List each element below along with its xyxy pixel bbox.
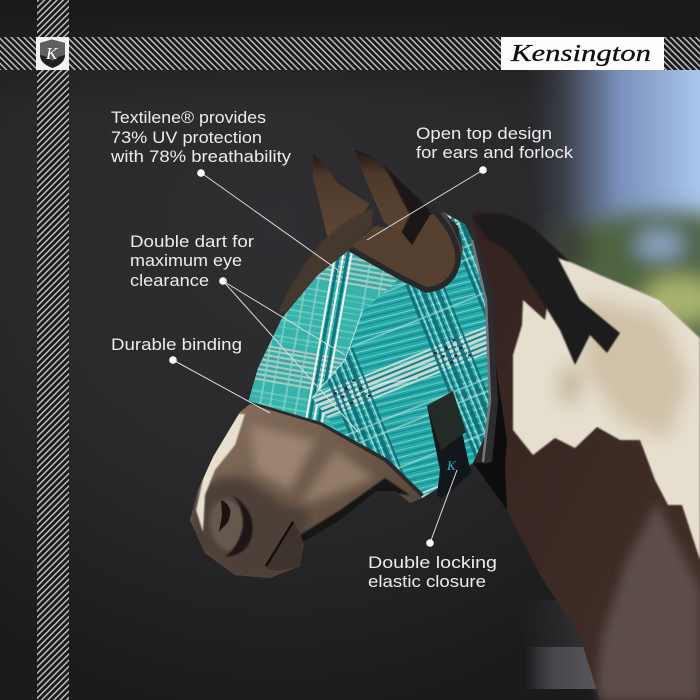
leader line xyxy=(430,470,457,543)
text: Durable binding xyxy=(111,336,242,354)
callout: Textilene xyxy=(110,109,338,270)
dark muzzle xyxy=(190,477,310,582)
callout: durable binding xyxy=(111,336,270,413)
forelock xyxy=(279,209,373,312)
dot xyxy=(479,166,487,174)
horse neck and body xyxy=(470,211,700,700)
throat shadow xyxy=(473,360,507,510)
white coat patch xyxy=(513,255,700,560)
dart seams xyxy=(312,312,418,398)
dot xyxy=(169,356,177,364)
icon: K shield logo: K xyxy=(45,44,59,63)
dot xyxy=(219,277,227,285)
back binding highlight xyxy=(472,240,490,462)
text: 73% UV protection xyxy=(111,129,262,147)
top opening binding xyxy=(350,208,458,290)
back binding xyxy=(464,222,498,464)
background floor: upper xyxy=(520,600,610,647)
leader line xyxy=(367,170,483,240)
coat tan shading xyxy=(558,295,690,440)
mouth xyxy=(266,522,303,570)
text: clearance xyxy=(130,272,209,290)
callout: open top design xyxy=(367,125,574,240)
plaid: base weave xyxy=(248,212,489,498)
closure strap: K xyxy=(446,458,457,473)
text: Textilene® provides xyxy=(111,109,266,127)
stripe band: horizontal left xyxy=(0,37,501,70)
poll and forehead xyxy=(352,212,463,291)
fly mask xyxy=(240,200,500,500)
dot xyxy=(426,539,434,547)
background floor: lit band xyxy=(525,647,605,689)
text: maximum eye xyxy=(130,252,242,270)
text xyxy=(110,109,292,166)
closure strap xyxy=(427,391,471,499)
text: for ears and forlock xyxy=(416,144,574,162)
horse nose and muzzle xyxy=(190,404,422,578)
stripe band: horizontal right xyxy=(664,37,700,70)
coat highlights xyxy=(250,425,375,505)
white blaze xyxy=(196,414,245,532)
mane xyxy=(472,213,620,365)
icon: K shield logo xyxy=(36,37,69,70)
ear: left xyxy=(313,155,370,240)
logo: Kensington wordmark: Kensington xyxy=(510,41,651,67)
shoulder grey coat xyxy=(598,503,700,700)
nostril xyxy=(206,495,253,557)
leader line xyxy=(200,172,338,270)
ear shadow xyxy=(384,165,445,250)
text: elastic closure xyxy=(368,573,486,591)
dot xyxy=(197,169,205,177)
leader line xyxy=(173,360,270,413)
text: Double locking xyxy=(368,554,497,572)
ear: right xyxy=(355,150,428,250)
text xyxy=(130,233,255,290)
text xyxy=(416,125,574,162)
logo: Kensington wordmark xyxy=(501,37,664,70)
plaid: face panel xyxy=(248,250,398,431)
text xyxy=(368,554,497,591)
jaw shadow xyxy=(300,478,410,545)
leader lines xyxy=(223,281,358,432)
callout: double dart xyxy=(130,233,358,432)
stripe band: vertical xyxy=(37,0,69,700)
text: Open top design xyxy=(416,125,552,143)
nose binding xyxy=(245,404,421,497)
text: with 78% breathability xyxy=(110,148,292,166)
text: Double dart for xyxy=(130,233,255,251)
callout: elastic closure xyxy=(368,470,497,591)
